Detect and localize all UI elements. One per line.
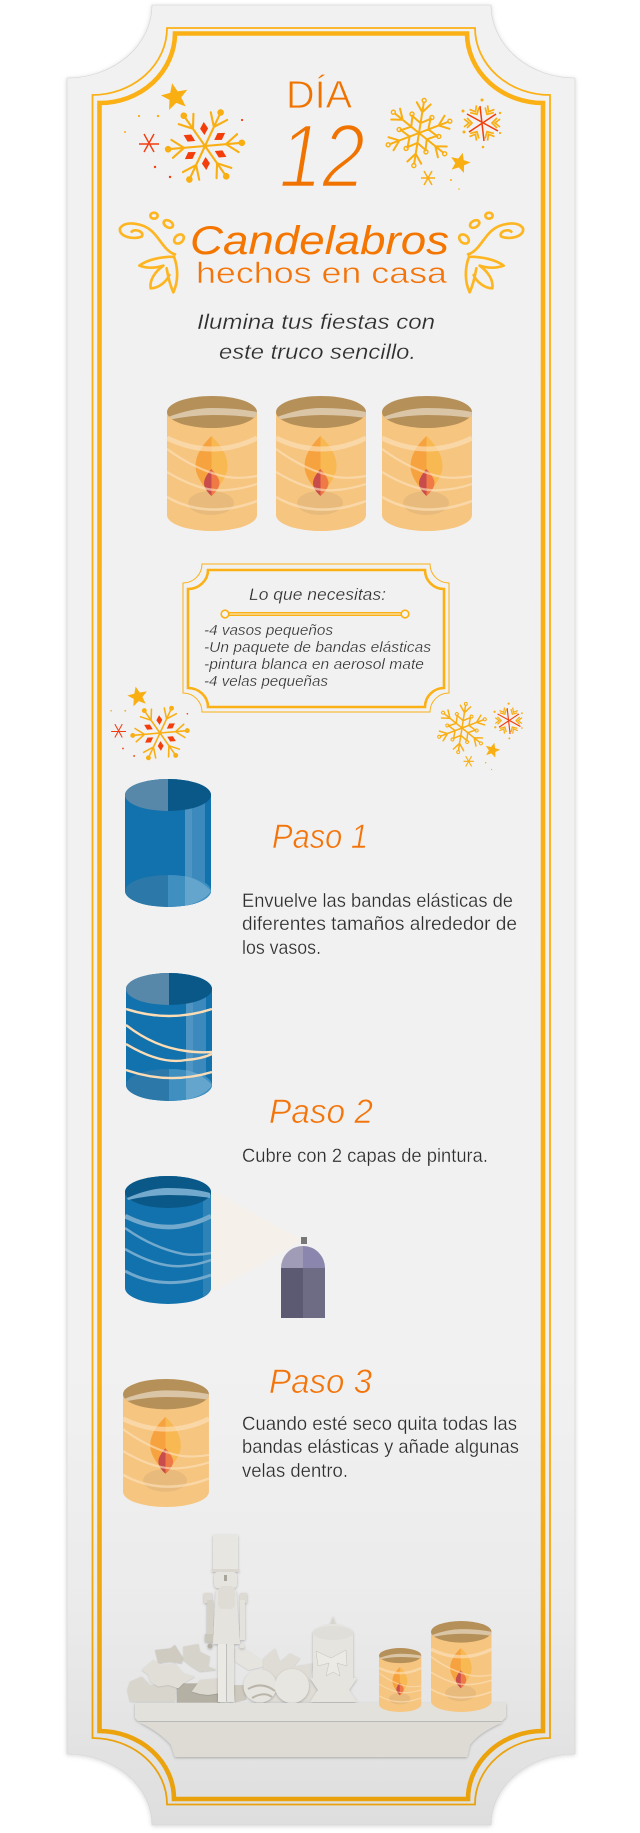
- decoration: small snowflake right: [435, 701, 523, 770]
- text: step 3: bandas elásticas y añade algunas: [242, 1436, 519, 1458]
- intro text: Ilumina tus fiestas con: [197, 310, 435, 334]
- heading: Paso 1: Paso 1: [272, 818, 368, 856]
- illustration: paper ornaments: [244, 1669, 309, 1703]
- icon: spray can: [281, 1237, 325, 1318]
- materials list: -Un paquete de bandas elásticas: [204, 639, 432, 656]
- text: step 3: [242, 1413, 519, 1482]
- materials list: -pintura blanca en aerosol mate: [204, 656, 424, 673]
- spray cone: [211, 1190, 302, 1293]
- icon: small candle on shelf: [379, 1648, 421, 1712]
- icon: plain blue glass: [125, 779, 211, 909]
- panel frame: [183, 564, 449, 712]
- materials list: -4 velas pequeñas: [204, 673, 328, 690]
- ornament: right flourish: [457, 213, 523, 292]
- heading: Paso 3: Paso 3: [269, 1363, 372, 1401]
- decoration: small snowflake left: [100, 685, 190, 763]
- panel divider: [221, 610, 409, 618]
- decoration: snowflake and stars right: [382, 97, 501, 190]
- decoration: snowflake and stars left: [124, 80, 246, 186]
- text: step 3: Cuando esté seco quita todas las: [242, 1413, 517, 1435]
- panel heading: Lo que necesitas:: [249, 586, 386, 604]
- materials list: [204, 622, 432, 690]
- text: step 2: Cubre con 2 capas de pintura.: [242, 1145, 488, 1167]
- card background: [67, 5, 575, 1825]
- illustration: white paper holly leaves: [127, 1644, 320, 1703]
- text: step 1: [242, 890, 517, 959]
- text: step 3: velas dentro.: [242, 1460, 348, 1482]
- icon: painted blue glass: [125, 1176, 211, 1306]
- gold double border: [92, 28, 550, 1804]
- icon: blue glass with elastic bands: [126, 973, 212, 1103]
- text: step 1: diferentes tamaños alrededor de: [242, 913, 517, 935]
- heading: Día: DÍA: [286, 74, 352, 117]
- icon: three candle glasses: [167, 396, 472, 531]
- heading: Paso 2: Paso 2: [269, 1093, 373, 1131]
- icon: large candle on shelf: [431, 1621, 491, 1712]
- illustration: paper candle: [310, 1616, 357, 1702]
- text: step 1: Envuelve las bandas elásticas de: [242, 890, 513, 912]
- title: Candelabros: Candelabros: [190, 219, 449, 263]
- panel: materials: [183, 564, 449, 712]
- materials list: -4 vasos pequeños: [204, 622, 333, 639]
- intro text: este truco sencillo.: [219, 340, 416, 364]
- text: step 1: los vasos.: [242, 937, 321, 959]
- illustration: shelf: [135, 1703, 506, 1757]
- heading: number 12: 12: [279, 107, 365, 207]
- icon: finished candle glass: [123, 1379, 209, 1507]
- subtitle: hechos en casa: hechos en casa: [196, 257, 447, 290]
- intro text: [197, 310, 435, 364]
- illustration: nutcracker: [204, 1535, 247, 1702]
- ornament: left flourish: [120, 213, 186, 292]
